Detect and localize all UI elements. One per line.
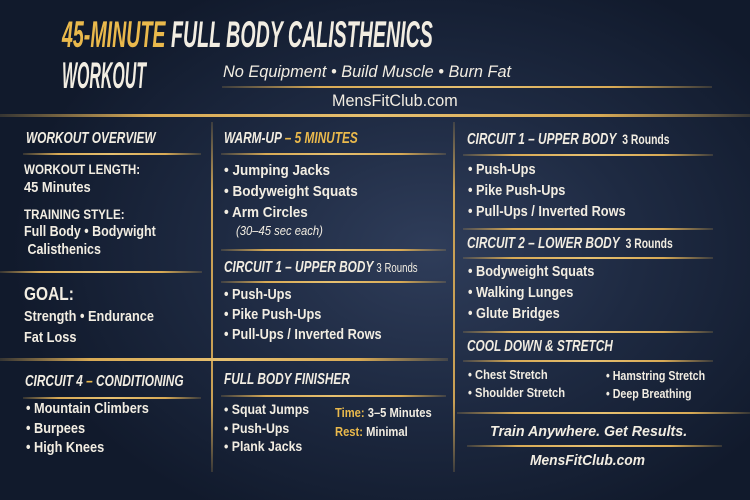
list: circuit 1: • Push-Ups	[224, 287, 292, 303]
panel: warm-up	[221, 130, 446, 238]
note: (30–45 sec each)	[236, 224, 323, 238]
panel: circuit 4	[23, 373, 201, 456]
list: finisher: • Squat Jumps	[224, 401, 309, 417]
text: training style: Full Body • Bodywight	[24, 224, 156, 240]
list: circuit 4: • Burpees	[26, 420, 85, 436]
text: training style: TRAINING STYLE:	[24, 207, 125, 222]
list: cool down right: • Hamstring Stretch	[606, 368, 705, 383]
heading: circuit 4: CIRCUIT 4 – CONDITIONING	[25, 373, 184, 390]
list: finisher: • Push-Ups	[224, 420, 289, 436]
tagline: Train Anywhere. Get Results.	[490, 423, 687, 440]
list: cool down left: • Shoulder Stretch	[468, 385, 565, 400]
heading: cool down: COOL DOWN & STRETCH	[467, 338, 613, 355]
heading: warm-up: WARM-UP – 5 MINUTES	[224, 130, 358, 147]
panel: cool down	[463, 338, 713, 401]
list: circuit 4	[26, 401, 149, 456]
panel: circuit 1 right	[463, 131, 713, 220]
panel: goal	[24, 284, 154, 346]
list: circuit 2: • Glute Bridges	[468, 306, 560, 322]
list: warm-up: • Arm Circles	[224, 204, 308, 221]
list: circuit 1 right: • Pike Push-Ups	[468, 183, 565, 199]
text: workout length: WORKOUT LENGTH:	[24, 162, 140, 177]
list: cool down left: • Chest Stretch	[468, 367, 548, 382]
text: time and rest: Rest: Minimal	[335, 424, 408, 439]
list: warm-up: • Bodyweight Squats	[224, 183, 358, 200]
list: cool down right	[606, 368, 705, 401]
text: time and rest	[335, 405, 432, 439]
heading: circuit 2: CIRCUIT 2 – LOWER BODY 3 Rounds	[467, 235, 673, 252]
text: time and rest: Time: 3–5 Minutes	[335, 405, 432, 420]
list: circuit 1 right	[468, 162, 626, 220]
panel: circuit 2	[463, 235, 713, 322]
heading: circuit 1: CIRCUIT 1 – UPPER BODY 3 Rounds	[224, 259, 418, 276]
list: finisher	[224, 401, 309, 454]
footer website: MensFitClub.com	[530, 452, 645, 469]
list: circuit 4: • Mountain Climbers	[26, 401, 149, 417]
list: circuit 1: • Pull-Ups / Inverted Rows	[224, 327, 382, 343]
text: goal items	[24, 309, 154, 346]
list: warm-up	[224, 162, 358, 221]
heading: goal: GOAL:	[24, 284, 74, 304]
list: circuit 1 right: • Push-Ups	[468, 162, 536, 178]
list: circuit 1	[224, 287, 382, 343]
list: circuit 2	[468, 264, 594, 322]
subtitle: No Equipment • Build Muscle • Burn Fat	[223, 62, 511, 81]
text: workout length	[24, 162, 140, 196]
heading: workout overview: WORKOUT OVERVIEW	[26, 130, 156, 147]
list: cool down right: • Deep Breathing	[606, 386, 691, 401]
heading: circuit 1 right: CIRCUIT 1 – UPPER BODY 3 Rounds	[467, 131, 669, 148]
text: goal items: Fat Loss	[24, 330, 76, 346]
list: circuit 1: • Pike Push-Ups	[224, 307, 321, 323]
list: circuit 2: • Walking Lunges	[468, 285, 573, 301]
list: cool down left	[468, 367, 565, 400]
panel: workout overview	[23, 130, 201, 258]
list: finisher: • Plank Jacks	[224, 438, 302, 454]
panel: circuit 1 middle	[221, 259, 446, 343]
panel: finisher	[221, 371, 446, 454]
text: training style	[24, 207, 156, 258]
text: workout length: 45 Minutes	[24, 179, 91, 196]
list: circuit 2: • Bodyweight Squats	[468, 264, 594, 280]
list: warm-up: • Jumping Jacks	[224, 162, 330, 179]
text: goal items: Strength • Endurance	[24, 309, 154, 325]
title line 2: WORKOUT	[62, 55, 146, 96]
list: circuit 4: • High Knees	[26, 440, 104, 456]
list: circuit 1 right: • Pull-Ups / Inverted Rows	[468, 204, 626, 220]
text: training style: Calisthenics	[27, 242, 101, 258]
website header: MensFitClub.com	[332, 91, 458, 110]
heading: finisher: FULL BODY FINISHER	[224, 371, 350, 388]
title: 45-MINUTE FULL BODY CALISTHENICS	[62, 14, 433, 55]
